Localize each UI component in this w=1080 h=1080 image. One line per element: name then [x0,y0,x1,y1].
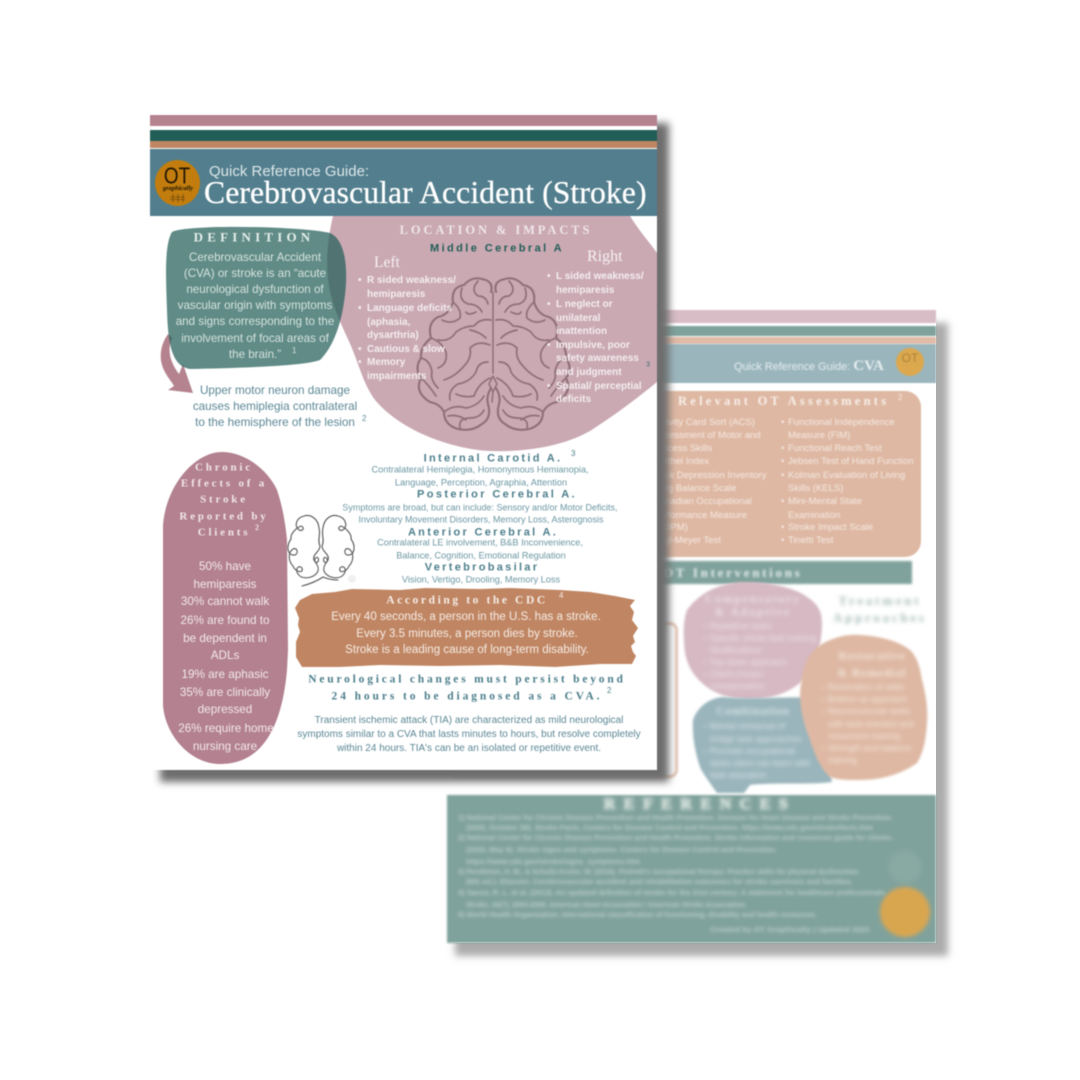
assessments list: Kolman Evaluation of Living [788,470,905,481]
chronic effects heading: Reported by [179,510,269,522]
left deficits list: impairments [367,371,426,382]
right deficits list: Spatial/ perceptial [556,381,642,392]
left deficits list: R sided weakness/ [367,275,456,286]
chronic effects statistics: 26% require home [178,722,274,735]
compensatory text: Compensatory [705,593,801,605]
references list: 3) Pendleton, H. M., & Schultz-Krohn, W. (2018). Pedretti's occupational therapy: Practice skills for physical dysfunction. [458,867,860,876]
front page: stroke quick reference [150,114,657,770]
assessments list: Assessment of Motor and [653,430,761,441]
internal carotid: Internal Carotid A. [424,452,562,464]
restorative text: ○ Restoration of skills [820,682,904,692]
left deficits list [358,275,456,382]
anterior cerebral: Contralateral LE involvement, B&B Inconvenience, [377,537,583,547]
references list: 5) World Health Organization. International classification of functioning, disability and health resources. [458,910,817,919]
assessments list: • [781,417,784,428]
assessments list: • [781,470,784,481]
compensatory text: ○ Client-chosen [702,669,764,679]
left deficits list: • [358,344,362,355]
definition heading: DEFINITION [194,230,314,244]
restorative text: with task-oriented and [828,719,914,729]
assessments list: Jebsen Test of Hand Function [788,456,914,467]
assessments list: Examination [788,510,840,521]
assessments list [653,417,914,546]
right deficits list: 3 [646,359,650,368]
OT interventions banner [473,561,912,584]
upper motor neuron note: causes hemiplegia contralateral [193,400,357,413]
references list: (2020, October 28). Stroke Facts. Centers for Disease Control and Prevention. https://www.cdc.gov/stroke/facts.htm [466,823,873,832]
definition body [176,251,334,361]
right column heading: Right [587,248,623,265]
top stripes [149,114,658,149]
restorative text: ○ Bottom-up approach [820,694,907,704]
assessments list: Beck Depression Inventory [653,470,767,481]
artist mark [348,575,356,583]
blob: restorative and remedial [798,633,929,782]
back header logo: OT [902,351,918,365]
right deficits list: and judgment [556,367,622,378]
subtitle: Quick Reference Guide: [209,162,369,180]
internal carotid: Contralateral Hemiplegia, Homonymous Hemianopia, [371,464,589,474]
assessments list: (COPM) [653,522,688,533]
faint watermark icon [888,850,922,884]
compensatory text: compensation [710,681,765,691]
chronic effects statistics: nursing care [193,740,257,753]
panel: location and impacts background [327,216,658,452]
right deficits list: • [547,271,551,282]
logo: OT [164,162,190,188]
references list: (2020, May 8). Stroke signs and symptoms. Centers for Disease Control and Prevention. [466,845,777,854]
restorative text: Restorative [838,650,906,662]
compensatory text: Modifications [710,645,761,655]
restorative text: ○ Strength and balance [820,743,911,753]
right deficits list: unilateral [556,313,600,324]
combination text [702,705,810,780]
panel: relevant OT assessments [473,391,921,557]
posterior cerebral: Posterior Cerebral A. [417,488,577,500]
chronic effects heading: Chronic [195,462,253,474]
TIA note: within 24 hours. TIA's can be an isolated or repetitive event. [337,742,601,754]
illustration: large brain [416,276,571,432]
references heading: REFERENCES [604,796,796,813]
restorative text: training [828,755,857,765]
middle cerebral subheading: Middle Cerebral A [430,242,564,254]
definition body: (CVA) or stroke is an “acute [184,267,326,280]
24 hour diagnosis callout: Neurological changes must persist beyond [308,673,626,685]
left deficits list: Memory [367,357,405,368]
front page shadow [160,123,669,782]
restorative text [820,650,914,766]
CDC facts: Stroke is a leading cause of long-term disability. [345,644,589,656]
assessments list: Barthel Index [653,456,709,467]
references list: 4) Sacco, R. L. et al. (2013). An updated definition of stroke for the 21st century: A statement for healthcare professionals. [458,888,887,897]
CDC text: 4 [559,591,563,600]
TIA note [297,715,641,754]
left deficits list: • [358,357,362,368]
panel: outlined approach box behind front page [449,622,678,778]
assessments list: Tinetti Test [788,535,833,546]
assessments reference mark: 2 [898,393,902,402]
combination text: tasks client can learn with [710,758,810,768]
chronic effects statistics: hemiparesis [193,578,257,591]
CDC facts: Every 40 seconds, a person in the U.S. has a stroke. [331,611,601,623]
anterior cerebral: Balance, Cognition, Emotional Regulation [396,550,566,560]
right deficits list [546,271,650,405]
CDC facts: Every 3.5 minutes, a person dies by stroke. [356,628,578,640]
references list: Stroke, 44(7), 2064-2089. American Heart Association / American Stroke Association. [466,900,747,909]
assessments list: Canadian Occupational [653,496,752,507]
restorative text: ○ Neuromuscular tasks [820,706,910,716]
left deficits list: • [358,275,362,286]
references list: Created by OT Graphically | Updated 2021 [710,925,870,934]
combination text: ○ Mental rehearsal of [702,721,785,731]
references list: 2) National Center for Chronic Disease Prevention and Health Promotion. Stroke information and resources guide for clients. [458,833,893,842]
chronic effects statistics: ADLs [211,649,239,662]
back page: CVA interventions and references [443,310,936,943]
posterior cerebral: Symptoms are broad, but can include: Sensory and/or Motor Deficits, [342,502,618,512]
treatment approaches heading [832,594,927,626]
assessments list: • [781,522,784,533]
chronic effects statistics: 26% are found to [180,614,270,627]
TIA note: Transient ischemic attack (TIA) are characterized as mild neurological [315,715,623,726]
definition body: vascular origin with symptoms [178,299,332,312]
right deficits list: L neglect or [556,299,612,310]
left deficits list: (aphasia, [367,317,410,328]
pill shape [162,451,289,765]
24 hour diagnosis callout [308,673,626,703]
assessments list: Measure (FIM) [788,430,850,441]
chronic effects heading [179,462,269,538]
chronic effects heading: Clients [198,526,250,538]
references list: https://www.cdc.gov/stroke/signs_symptoms.htm [466,857,640,866]
internal carotid: Language, Perception, Agraphia, Attention [395,477,567,487]
compensatory text: ○ Repetitive tasks [702,621,772,631]
back header logo [896,348,924,376]
header band [150,149,657,216]
assessments list: Process Skills [653,443,712,454]
left deficits list: dysarthria) [367,330,419,341]
assessments list: Functional Independence [788,417,895,428]
logo: graphically [163,185,193,192]
right deficits list: safety awareness [556,353,639,364]
right deficits list: deficits [556,394,591,405]
compensatory text: & Adaptive [715,606,791,618]
left column heading: Left [374,254,400,271]
combination text: Combination [716,705,790,717]
references list: (8th ed.). Elsevier. Cerebrovascular accident and rehabilitation outcomes for stroke survivors and families. [466,877,853,886]
assessments heading: Relevant OT Assessments [678,394,889,408]
location and impacts text [358,223,650,405]
chronic effects statistics: 30% cannot walk [181,595,269,608]
CDC facts [331,610,601,656]
restorative text: movement training [828,731,900,741]
anterior cerebral [376,526,583,562]
treatment approaches heading: Approaches [833,611,927,625]
right deficits list: • [547,381,551,392]
chronic effects heading: 2 [255,523,259,532]
right deficits list: inattention [556,326,607,337]
assessments list: • [781,496,784,507]
assessments list: Berg Balance Scale [653,483,736,494]
24 hour diagnosis callout: 24 hours to be diagnosed as a CVA. [332,690,602,702]
blob: combination [691,696,834,794]
left deficits list: • [358,303,362,314]
24 hour diagnosis callout: 2 [607,686,611,695]
right deficits list: L sided weakness/ [556,271,644,282]
vertebrobasilar: Vision, Vertigo, Drooling, Memory Loss [402,574,560,584]
upper motor neuron note: Upper motor neuron damage [200,384,350,397]
right deficits list: hemiparesis [556,285,614,296]
right deficits list: Impulsive, poor [556,340,630,351]
logo [155,160,200,206]
left deficits list: Language deficits [367,303,452,314]
compensatory text: ○ Specific whole-task training [702,633,816,643]
panel: definition blob [165,226,347,370]
assessments list: Mini-Mental State [788,496,862,507]
interventions heading: OT Interventions [663,565,802,580]
definition body: the brain.” [229,348,281,361]
upper motor neuron note: 2 [362,414,366,423]
CDC heading: According to the CDC [386,594,548,606]
icon: curved arrow [160,334,194,394]
artery list [342,449,618,586]
assessments list: Activity Card Sort (ACS) [653,417,755,428]
posterior cerebral [342,488,618,526]
internal carotid: 3 [571,449,575,458]
combination text: ○ Promote occupational [702,746,795,756]
back page top stripes [663,309,937,344]
chronic effects statistics: be dependent in [183,632,267,645]
chronic effects heading: Stroke [200,494,248,506]
posterior cerebral: Involuntary Movement Disorders, Memory Loss, Asterognosis [358,514,604,524]
upper motor neuron note: to the hemisphere of the lesion [195,416,355,429]
treatment approaches heading: Treatment [839,594,921,608]
internal carotid [371,449,589,488]
vertebrobasilar [402,561,560,586]
definition body: and signs corresponding to the [176,315,334,328]
definition body: neurological dysfunction of [186,283,324,296]
vertebrobasilar: Vertebrobasilar [425,561,539,573]
logo ornament [170,194,186,202]
illustration: small line brain [286,514,356,588]
TIA note: symptoms similar to a CVA that lasts minutes to hours, but resolve completely [297,729,641,740]
compensatory text: ○ Top-down approach [702,657,787,667]
assessments list: Functional Reach Test [788,443,882,454]
anterior cerebral: Anterior Cerebral A. [408,526,558,538]
assessments list: Performance Measure [653,510,747,521]
chronic effects statistics: depressed [198,703,252,716]
assessments list: Stroke Impact Scale [788,522,873,533]
chronic effects statistics [178,560,274,753]
chronic effects heading: Effects of a [181,478,267,490]
restorative text: & Remedial [837,667,907,679]
right deficits list: • [547,340,551,351]
combination text: bridge task approaches [710,734,801,744]
definition body: Cerebrovascular Accident [189,251,321,264]
location heading: LOCATION & IMPACTS [400,223,592,237]
references list [458,813,893,934]
assessments list: Skills (KELS) [788,483,843,494]
title: Cerebrovascular Accident (Stroke) [204,174,647,210]
back header title: Quick Reference Guide: CVA [734,358,884,374]
assessments list: • [781,443,784,454]
panel: CDC statistics brush stroke [294,587,638,668]
references list: 1) National Center for Chronic Disease Prevention and Health Promotion. Division for Heart Disease and Stroke Prevention. [458,813,893,822]
chronic effects statistics: 50% have [199,560,251,573]
definition text [176,230,334,361]
right deficits list: • [547,299,551,310]
compensatory text [702,593,816,691]
combination text: task education [710,770,767,780]
assessments list: • [781,535,784,546]
references logo seal [880,887,930,937]
assessments list: • [781,456,784,467]
chronic effects statistics: 19% are aphasic [181,668,269,681]
panel: references [447,795,936,943]
left deficits list: Cautious & slow [367,344,445,355]
back page header band [443,344,936,383]
chronic effects statistics: 35% are clinically [180,686,270,699]
definition body: involvement of focal areas of [181,332,329,345]
assessments list: Fugl-Meyer Test [653,535,721,546]
blob: compensatory and adaptive [682,580,824,699]
definition body: 1 [292,346,296,355]
panel: chronic effects pill [162,451,289,765]
upper motor neuron note [192,384,367,429]
CDC text [331,591,601,656]
left deficits list: hemiparesis [367,289,425,300]
